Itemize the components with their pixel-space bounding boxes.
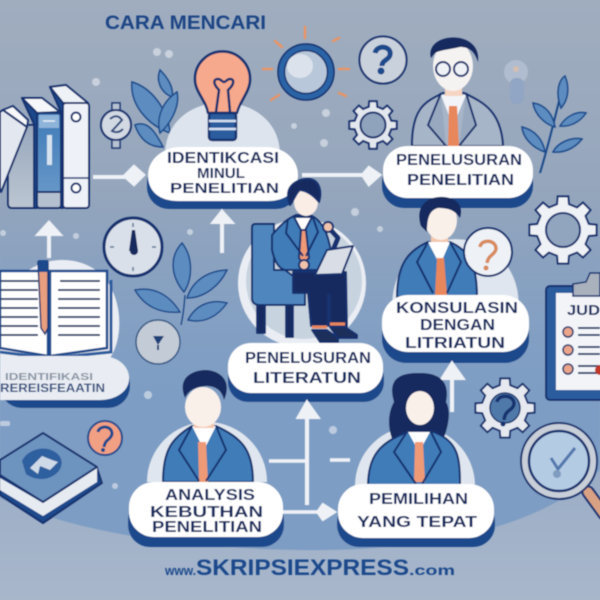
card: identifikasi bbox=[148, 147, 298, 201]
icon: light bulb bbox=[195, 52, 250, 140]
card: literature label: REREISFEAATIN bbox=[0, 381, 105, 395]
icon: small gear with question bbox=[101, 103, 131, 148]
card: konsultasi: LITRIATUN bbox=[405, 335, 505, 352]
arrow: up left bbox=[39, 223, 59, 258]
person: consultant bbox=[397, 197, 477, 297]
backdrop: selection person bbox=[355, 426, 475, 486]
backdrop: analysis person bbox=[147, 422, 267, 482]
card: analysis: ANALYSIS bbox=[165, 487, 255, 504]
icon: closed book lower left bbox=[0, 433, 102, 523]
card: konsultasi: KONSULASIN bbox=[396, 300, 518, 317]
icon: books bbox=[0, 85, 89, 208]
icon: faint marks bbox=[0, 48, 383, 489]
icon: clipboard: JUD bbox=[567, 302, 600, 319]
icon: sun rays bbox=[263, 27, 349, 100]
icon: clipboard bbox=[546, 273, 600, 400]
card: literature label shadow bbox=[0, 362, 130, 408]
card: penelusuran penelitian shadow bbox=[382, 160, 533, 208]
card: penelusuran literatur: LITERATUN bbox=[253, 370, 361, 387]
card: selection: YANG TEPAT bbox=[357, 514, 478, 531]
icon: plant right bbox=[522, 76, 586, 173]
backdrop: bulb cloud bbox=[165, 102, 280, 175]
icon: question bubble bbox=[464, 228, 512, 276]
arrow: connector horizontal bbox=[269, 460, 350, 519]
card: penelusuran literatur shadow bbox=[228, 358, 384, 402]
icon: open book bbox=[0, 260, 111, 366]
icon: magnifier bbox=[521, 423, 600, 514]
icon: faint figure bbox=[504, 60, 528, 104]
card: analysis bbox=[129, 482, 283, 537]
card: analysis shadow bbox=[128, 498, 284, 547]
arrow: seated to penelusuran bbox=[302, 168, 379, 184]
icon: question circle bbox=[360, 36, 406, 84]
person: selection bbox=[368, 373, 460, 486]
person: seated with laptop bbox=[252, 179, 357, 342]
icon: plant centre bbox=[135, 243, 227, 325]
card: penelusuran penelitian bbox=[383, 146, 533, 198]
card: konsultasi bbox=[382, 295, 529, 352]
backdrop: book cloud bbox=[0, 260, 119, 358]
card: selection: PEMILIHAN bbox=[369, 491, 468, 508]
icon: gear with question bbox=[475, 378, 535, 438]
card: penelusuran penelitian: PENELUSURAN bbox=[396, 152, 522, 169]
backdrop: seated person bbox=[238, 219, 366, 347]
card: konsultasi shadow bbox=[382, 310, 529, 363]
card: identifikasi: IDENTIKCASI bbox=[167, 150, 279, 167]
icon: small clock bbox=[136, 320, 180, 364]
card: identifikasi: PENELITIAN bbox=[170, 180, 279, 197]
footer: website: .com bbox=[409, 562, 455, 578]
icon: large gear bbox=[529, 196, 597, 264]
card: penelusuran penelitian: PENELITIAN bbox=[407, 172, 514, 189]
card: identifikasi: MINUL bbox=[197, 165, 245, 182]
card: literature label: IDENTIFIKASI bbox=[5, 372, 93, 383]
card: analysis: PENELITIAN bbox=[152, 519, 262, 536]
arrow: up mid bottom bbox=[299, 403, 317, 505]
arrow: books to identifikasi bbox=[93, 167, 143, 184]
person: analysis bbox=[163, 370, 253, 482]
card: penelusuran literatur: PENELUSURAN bbox=[245, 350, 371, 367]
backdrop: consultation person bbox=[392, 239, 518, 310]
person: researcher with glasses bbox=[412, 38, 503, 146]
card: selection bbox=[338, 484, 494, 538]
footer: website: SKRIPSIEXPRESS bbox=[196, 555, 409, 580]
card: selection shadow bbox=[337, 500, 495, 547]
icon: small gear bbox=[349, 101, 397, 149]
icon: clock bbox=[104, 218, 162, 276]
background blue area bbox=[0, 190, 600, 550]
card: analysis: KEBUTHAN bbox=[150, 504, 263, 521]
title: CARA MENCARI bbox=[105, 13, 266, 34]
footer: website: www. bbox=[164, 563, 196, 578]
icon: orange question bbox=[88, 421, 122, 455]
icon: ring bbox=[278, 44, 334, 100]
arrow: up centre bbox=[214, 212, 231, 253]
icon: plant top left bbox=[132, 70, 178, 147]
arrow: up right bbox=[443, 364, 462, 412]
card: penelusuran literatur bbox=[228, 343, 383, 393]
footer: website bbox=[164, 555, 455, 580]
card: literature label bbox=[0, 356, 129, 400]
card: identifikasi shadow bbox=[147, 160, 298, 209]
card: konsultasi: DENGAN bbox=[420, 317, 495, 334]
